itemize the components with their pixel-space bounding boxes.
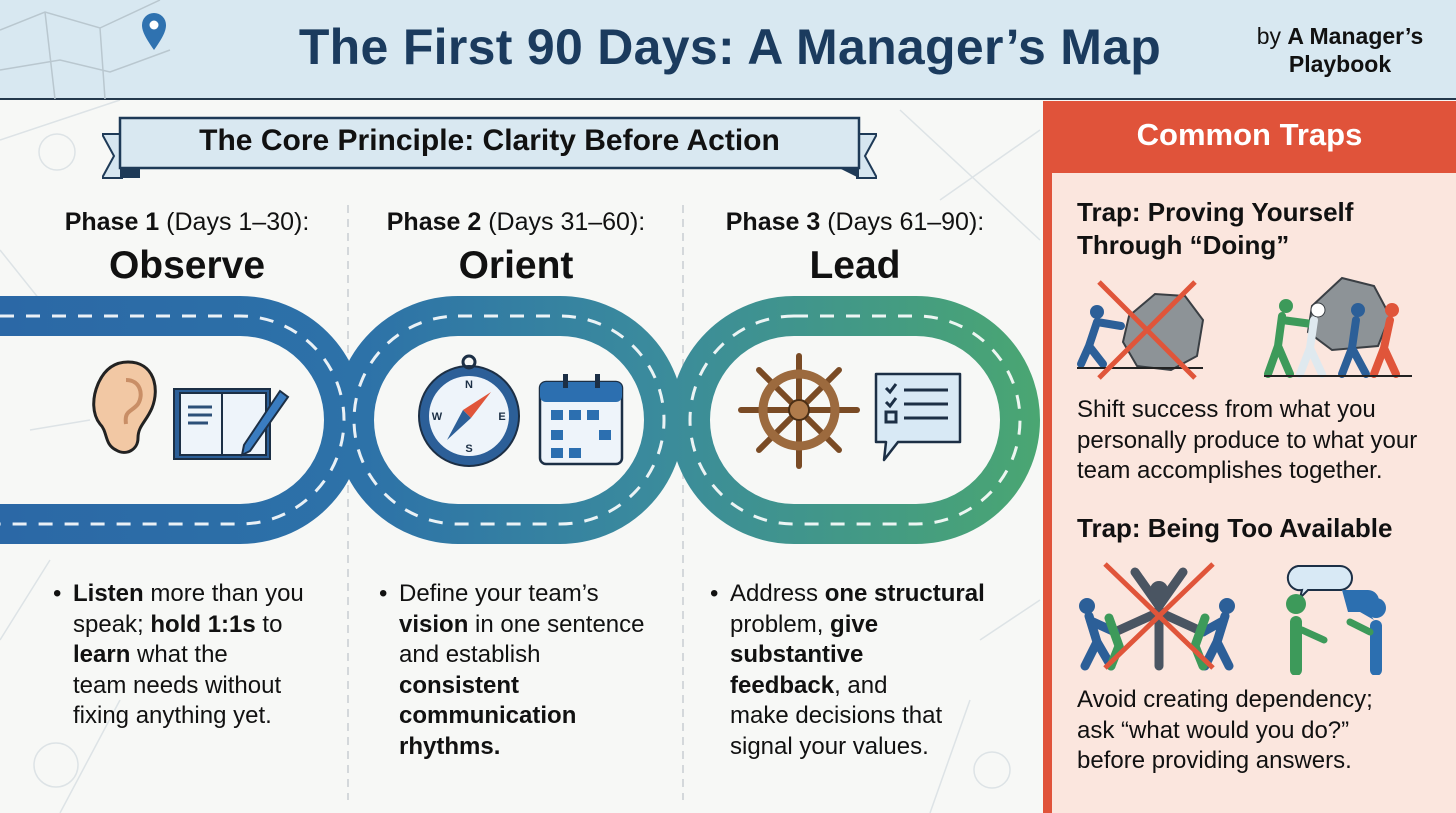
bullet: phase 2: Define your team’s bbox=[399, 580, 599, 607]
icon: compass: S bbox=[465, 443, 473, 455]
trap 2 text: Avoid creating dependency; bbox=[1077, 686, 1373, 713]
icon: ship wheel bbox=[738, 353, 860, 469]
dividers bbox=[347, 205, 684, 800]
phase 1 heading bbox=[65, 208, 309, 287]
bullet: phase 2: and establish bbox=[399, 641, 540, 668]
title: The First 90 Days: A Manager’s Map bbox=[299, 19, 1161, 75]
trap 1 heading: Through “Doing” bbox=[1077, 230, 1289, 260]
bullet: phase 2: rhythms. bbox=[399, 732, 500, 760]
icon: map pin bbox=[142, 13, 166, 50]
trap 2 heading: Trap: Being Too Available bbox=[1077, 513, 1392, 543]
bullet: phase 1 bbox=[73, 579, 304, 732]
bullet: phase 3: feedback, and bbox=[730, 672, 887, 698]
trap 1 heading bbox=[1077, 197, 1354, 260]
icon: compass: E bbox=[498, 411, 506, 423]
trap 1 text: Shift success from what you bbox=[1077, 396, 1376, 423]
phase 3 heading: Phase 3 (Days 61–90): bbox=[726, 208, 984, 236]
bullet: phase 1: learn what the bbox=[73, 641, 228, 668]
bullet: phase 2 bbox=[399, 579, 644, 762]
icon: notebook and pen bbox=[173, 388, 290, 460]
icon: ear bbox=[92, 360, 157, 454]
bullet: phase 1: Listen more than you bbox=[73, 580, 304, 607]
bullet: phase 1: team needs without bbox=[73, 672, 281, 698]
bullet: phase 3 bbox=[730, 579, 985, 762]
phase 2 heading: Phase 2 (Days 31–60): bbox=[387, 208, 645, 236]
banner: core principle: The Core Principle: Clarity Before Action bbox=[199, 124, 780, 157]
icon: compass: N bbox=[465, 379, 473, 391]
panel: common traps bbox=[1043, 101, 1456, 813]
bullet: phase 3: signal your values. bbox=[730, 732, 929, 760]
bullet: phase 2: communication bbox=[399, 702, 576, 729]
icon: two people talking bbox=[1286, 565, 1386, 675]
bullet: phase 2: consistent bbox=[399, 672, 519, 698]
icon: team pushing rock bbox=[1264, 276, 1412, 378]
trap 1 text bbox=[1077, 396, 1417, 484]
trap 2 text: ask “what would you do?” bbox=[1077, 716, 1349, 744]
bullet: phase 3: Address one structural bbox=[730, 580, 985, 607]
byline: by A Manager’s Playbook bbox=[1257, 23, 1423, 77]
header bar bbox=[0, 0, 1456, 100]
banner: core principle bbox=[102, 116, 877, 179]
bullet: phase 3: problem, give bbox=[730, 610, 878, 638]
road bbox=[0, 296, 1040, 544]
icon: compass bbox=[418, 354, 520, 467]
bullet: phase 2: vision in one sentence bbox=[399, 610, 644, 638]
icon: compass: W bbox=[432, 411, 443, 423]
bullet: phase 3: substantive bbox=[730, 641, 863, 668]
icon: solo pushing rock crossed bbox=[1077, 280, 1204, 380]
phase 1 heading: Observe bbox=[109, 244, 265, 287]
phase 3 heading bbox=[726, 208, 984, 287]
phase 2 heading: Orient bbox=[459, 244, 573, 287]
bullet: phase 1: speak; hold 1:1s to bbox=[73, 610, 282, 638]
bullet: phase 3: make decisions that bbox=[730, 702, 942, 729]
trap 1 heading: Trap: Proving Yourself bbox=[1077, 197, 1353, 227]
panel heading: Common Traps bbox=[1137, 117, 1362, 152]
phase 3 heading: Lead bbox=[809, 244, 901, 287]
phase 1 heading: Phase 1 (Days 1–30): bbox=[65, 208, 309, 236]
phase 2 heading bbox=[387, 208, 645, 287]
icon: manager pulled crossed bbox=[1079, 562, 1235, 670]
icon: checklist speech bubble bbox=[874, 372, 962, 462]
bullet: phase 1: fixing anything yet. bbox=[73, 702, 272, 729]
trap 1 text: personally produce to what your bbox=[1077, 426, 1417, 454]
trap 1 text: team accomplishes together. bbox=[1077, 457, 1382, 484]
trap 2 text: before providing answers. bbox=[1077, 747, 1352, 774]
icon: calendar bbox=[538, 374, 624, 466]
trap 2 text bbox=[1077, 686, 1373, 774]
